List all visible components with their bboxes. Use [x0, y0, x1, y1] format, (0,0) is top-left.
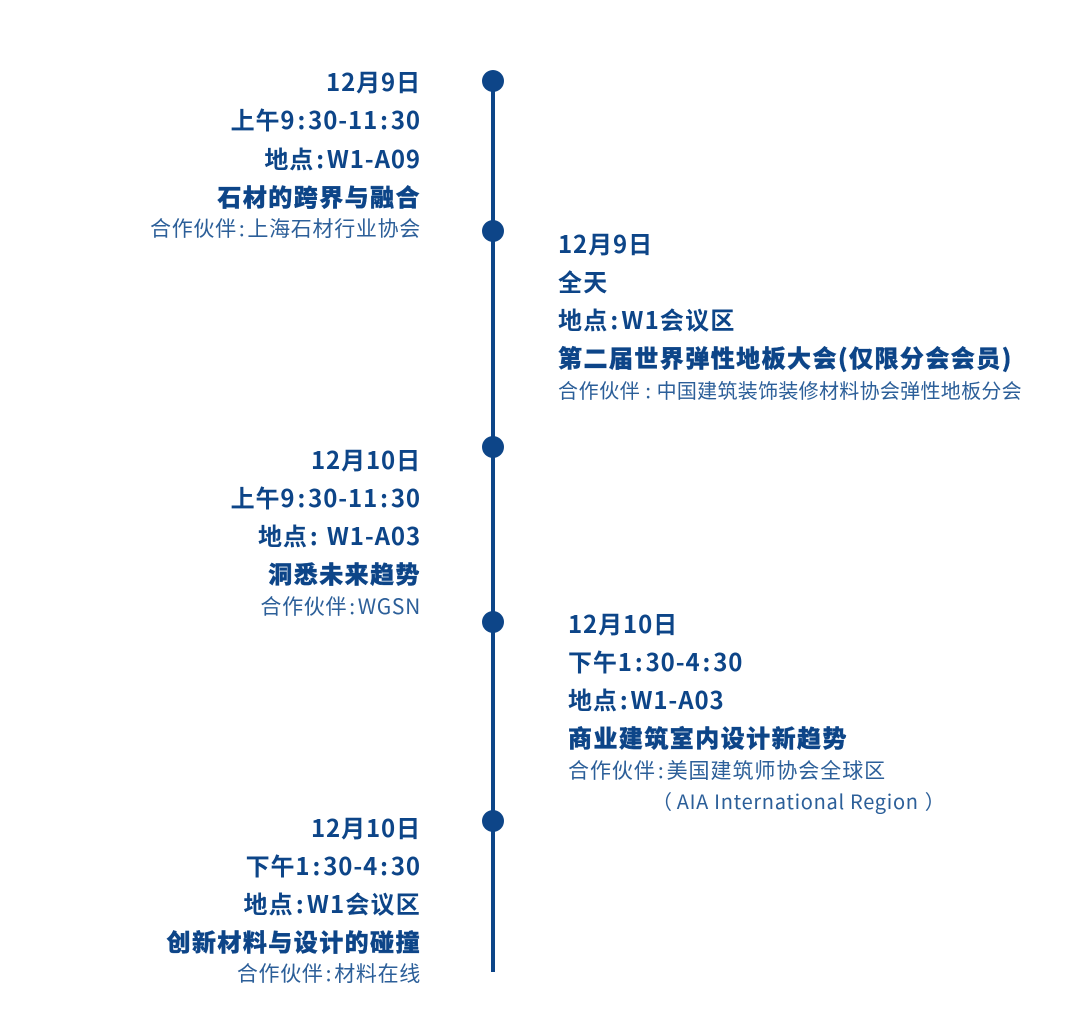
event 2 venue: 地点:W1会议区	[558, 301, 736, 336]
event 1 date: 12月9日	[326, 63, 421, 98]
event 4 time: 下午1:30-4:30	[568, 643, 743, 678]
event 5 title: 创新材料与设计的碰撞	[166, 923, 421, 958]
event 5 venue: 地点:W1会议区	[243, 885, 421, 920]
timeline dot 2	[482, 220, 504, 242]
event 3 time: 上午9:30-11:30	[231, 479, 421, 514]
event 2 title: 第二届世界弹性地板大会(仅限分会会员)	[558, 339, 1013, 374]
timeline dot 5	[482, 810, 504, 832]
event 5 partner: 合作伙伴:材料在线	[237, 958, 421, 988]
event 4 date: 12月10日	[568, 605, 678, 640]
event 5 time: 下午1:30-4:30	[246, 847, 421, 882]
event 2 date: 12月9日	[558, 225, 653, 260]
event 3 date: 12月10日	[311, 441, 421, 476]
event 3 title: 洞悉未来趋势	[268, 555, 421, 590]
event 4 partner: 合作伙伴:美国建筑师协会全球区	[568, 755, 886, 785]
event 5 date: 12月10日	[311, 809, 421, 844]
event 1 time: 上午9:30-11:30	[231, 101, 421, 136]
timeline dot 1	[482, 70, 504, 92]
event 1 venue: 地点:W1-A09	[264, 140, 421, 175]
timeline dot 4	[482, 611, 504, 633]
event 3 venue: 地点: W1-A03	[258, 517, 421, 552]
event 2 time: 全天	[558, 263, 608, 298]
event 1 title: 石材的跨界与融合	[217, 178, 421, 213]
event 4 title: 商业建筑室内设计新趋势	[568, 719, 848, 754]
event 4 venue: 地点:W1-A03	[568, 681, 725, 716]
event 4 partner english name: （AIA International Region ）	[652, 786, 945, 815]
timeline axis	[491, 80, 495, 972]
timeline dot 3	[482, 436, 504, 458]
event 2 partner: 合作伙伴:中国建筑装饰装修材料协会弹性地板分会	[558, 375, 1022, 404]
event 1 partner: 合作伙伴:上海石材行业协会	[150, 213, 421, 243]
event 3 partner: 合作伙伴:WGSN	[260, 591, 421, 621]
